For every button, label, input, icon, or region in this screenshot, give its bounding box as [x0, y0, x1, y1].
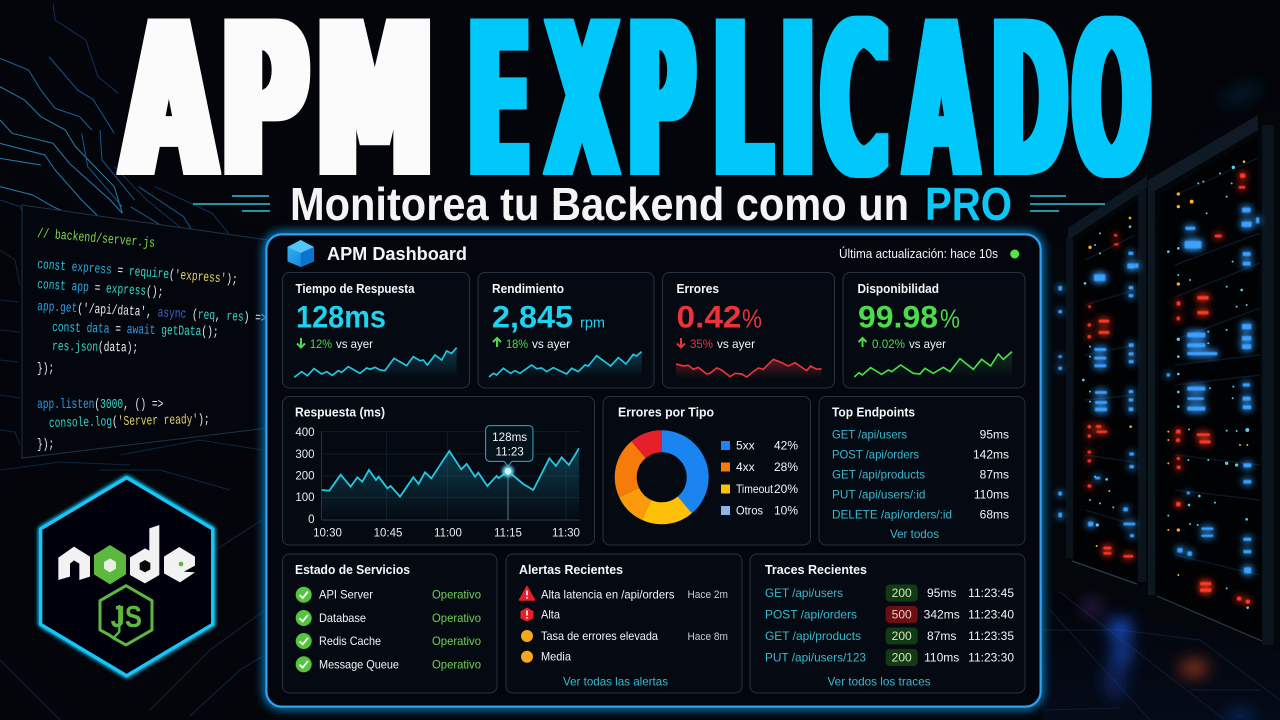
panel: Errores: Errores: [676, 281, 719, 296]
service rows: Operativo: [432, 634, 481, 648]
trace rows: 11:23:30: [968, 651, 1014, 665]
panel: Rendimiento: vs ayer: [532, 337, 570, 351]
donut legend: 42%: [774, 438, 798, 452]
panel: Traces Recientes: Traces Recientes: [765, 562, 867, 577]
panel: Top Endpoints: DELETE /api/orders/:id: [832, 508, 952, 522]
x axis labels: 10:30: [313, 528, 342, 540]
panel: Alertas Recientes: [506, 554, 742, 693]
subtitle: PRO: [925, 178, 1012, 230]
panel: Respuesta line chart: Respuesta (ms): [295, 404, 385, 420]
floor lines: [1042, 592, 1280, 720]
trace rows: 87ms: [927, 629, 956, 643]
panel: Top Endpoints: 142ms: [973, 448, 1009, 462]
donut legend: Otros: [736, 504, 763, 518]
trace rows: 500: [892, 607, 912, 621]
code lines: res.json(data);: [52, 338, 138, 356]
heading: APM Dashboard: APM Dashboard: [327, 244, 467, 264]
tooltip: 11:23: [495, 445, 524, 458]
server racks photo area: [1042, 82, 1280, 720]
panel: Disponibilidad: vs ayer: [909, 337, 946, 351]
panel: Rendimiento: 2,845: [492, 298, 573, 334]
code lines: app.get('/api/data', async (req, res) => {: [37, 298, 279, 327]
tooltip: [486, 426, 533, 466]
panel: Errores: 35%: [690, 337, 713, 351]
trace rows: 200: [892, 586, 912, 600]
subtitle speed lines right: [1030, 196, 1105, 211]
code lines: });: [37, 436, 54, 453]
service rows: API Server: [319, 588, 373, 602]
panel: Rendimiento: 18%: [506, 337, 528, 351]
panel: Top Endpoints: GET /api/products: [832, 468, 925, 482]
panel: Errores: 0.42: [676, 298, 742, 334]
panel: Top Endpoints: 68ms: [980, 508, 1009, 522]
trace rows: 11:23:45: [968, 586, 1014, 600]
panel: Top Endpoints: POST /api/orders: [832, 448, 919, 462]
trace rows: PUT /api/users/123: [765, 651, 866, 665]
donut legend: 4xx: [736, 460, 755, 474]
background: circuit traces: [0, 3, 228, 233]
trace rows: [765, 584, 1014, 666]
subtitle speed lines left: [193, 196, 270, 211]
code lines: });: [37, 360, 54, 377]
code lines: const data = await getData();: [52, 319, 219, 340]
x axis labels: 11:30: [552, 528, 580, 540]
panel: Errores por Tipo: [603, 396, 810, 545]
panel: Errores: vs ayer: [717, 337, 755, 351]
trace rows: 200: [892, 629, 912, 643]
panel: Tiempo de Respuesta: 128ms: [296, 298, 386, 334]
panel: APM dashboard: [266, 234, 1040, 706]
y axis labels: 0: [308, 514, 314, 526]
donut legend: [721, 438, 798, 518]
panel: Estado de Servicios: Estado de Servicios: [295, 562, 410, 577]
panel: Tiempo de Respuesta: 12%: [310, 337, 332, 351]
donut legend: 20%: [774, 482, 798, 496]
panel: Rendimiento: Rendimiento: [492, 281, 564, 296]
floor reflections: [1083, 600, 1254, 720]
panel: Disponibilidad: Disponibilidad: [858, 281, 939, 296]
trace rows: 11:23:40: [968, 607, 1014, 621]
code lines: app.listen(3000, () =>: [37, 396, 163, 413]
background: faint lower circuit traces: [0, 250, 265, 720]
panel: Top Endpoints: 110ms: [974, 488, 1009, 502]
subtitle: Monitorea tu Backend como un: [290, 178, 909, 230]
panel: Top Endpoints: PUT /api/users/:id: [832, 488, 926, 502]
alert rows: Tasa de errores elevada: [541, 629, 658, 643]
donut legend: 10%: [774, 504, 798, 518]
alert rows: Media: [541, 650, 571, 664]
panel: Estado de Servicios: [282, 554, 497, 693]
panel: Disponibilidad: 0.02%: [872, 337, 905, 351]
alert rows: Alta: [541, 608, 560, 622]
y axis labels: 200: [295, 470, 314, 482]
panel: Tiempo de Respuesta: vs ayer: [336, 337, 373, 351]
trace rows: 95ms: [927, 586, 956, 600]
LEDs blue: [1058, 208, 1259, 411]
trace rows: 11:23:35: [968, 629, 1014, 643]
service rows: Redis Cache: [319, 634, 381, 648]
y axis labels: 300: [295, 449, 314, 461]
panel: Errores: [662, 272, 834, 388]
trace rows: GET /api/products: [765, 629, 861, 643]
donut legend: 5xx: [736, 438, 755, 452]
service rows: Operativo: [432, 657, 481, 671]
panel: Top Endpoints: 95ms: [980, 428, 1009, 442]
panel: Tiempo de Respuesta: Tiempo de Respuesta: [296, 281, 415, 296]
panel: Top Endpoints: 87ms: [980, 468, 1009, 482]
panel: Traces Recientes: [750, 554, 1025, 693]
icon: blue cube: [288, 240, 314, 267]
panel: Respuesta line chart: [282, 396, 594, 545]
code lines: console.log('Server ready');: [49, 411, 210, 432]
x axis labels: 10:45: [374, 528, 402, 540]
panel: Traces Recientes: Ver todos los traces: [828, 674, 930, 688]
panel: Disponibilidad: %: [940, 304, 960, 334]
panel: Rendimiento: [478, 272, 654, 388]
code lines: // backend/server.js: [37, 226, 156, 251]
icon: js hexagon: JS: [111, 600, 142, 634]
x axis labels: 11:00: [434, 528, 462, 540]
y axis labels: [295, 427, 314, 526]
panel: Alertas Recientes: Alertas Recientes: [519, 562, 623, 577]
trace rows: POST /api/orders: [765, 607, 857, 621]
code lines: [37, 226, 279, 453]
alert rows: Hace 8m: [688, 631, 728, 643]
icon: js hexagon: [100, 586, 152, 645]
node.js hexagon badge: [41, 478, 213, 676]
LEDs red and amber: [1088, 173, 1245, 338]
panel: Top Endpoints: [819, 396, 1025, 545]
donut legend: Timeout: [736, 482, 774, 496]
panel: Disponibilidad: 99.98: [858, 298, 938, 334]
trace rows: 342ms: [924, 607, 960, 621]
x axis labels: [313, 528, 580, 540]
service rows: Message Queue: [319, 657, 399, 671]
trace rows: GET /api/users: [765, 586, 843, 600]
panel: Top Endpoints: Top Endpoints: [832, 404, 915, 420]
y axis labels: 100: [295, 492, 314, 504]
tooltip marker: [504, 467, 512, 475]
tooltip: 128ms: [492, 431, 527, 444]
panel: code editor: [22, 205, 279, 458]
code lines: const app = express();: [37, 276, 164, 301]
panel: Tiempo de Respuesta: [282, 272, 470, 388]
icon: node wordmark: [58, 525, 195, 584]
alert rows: Hace 2m: [688, 589, 728, 601]
service rows: [296, 587, 481, 672]
panel: Top Endpoints: Ver todos: [890, 527, 939, 541]
service rows: Database: [319, 611, 366, 625]
code lines: const express = require('express');: [37, 257, 238, 288]
alert rows: Alta latencia en /api/orders: [541, 587, 674, 601]
panel: Rendimiento: rpm: [580, 314, 605, 332]
panel: Alertas Recientes: Ver todas las alertas: [563, 674, 668, 688]
panel: Errores por Tipo: Errores por Tipo: [618, 404, 714, 420]
service rows: Operativo: [432, 611, 481, 625]
y axis labels: 400: [295, 427, 314, 439]
trace rows: 200: [892, 651, 912, 665]
panel: Errores: %: [742, 304, 762, 334]
x axis labels: 11:15: [494, 528, 522, 540]
service rows: Operativo: [432, 588, 481, 602]
panel: Top Endpoints: GET /api/users: [832, 428, 907, 442]
last update status: Última actualización: hace 10s: [839, 246, 998, 261]
alert rows: [520, 586, 728, 664]
trace rows: 110ms: [924, 651, 959, 665]
donut chart: [626, 441, 698, 513]
panel: Disponibilidad: [843, 272, 1025, 388]
donut legend: 28%: [774, 460, 798, 474]
